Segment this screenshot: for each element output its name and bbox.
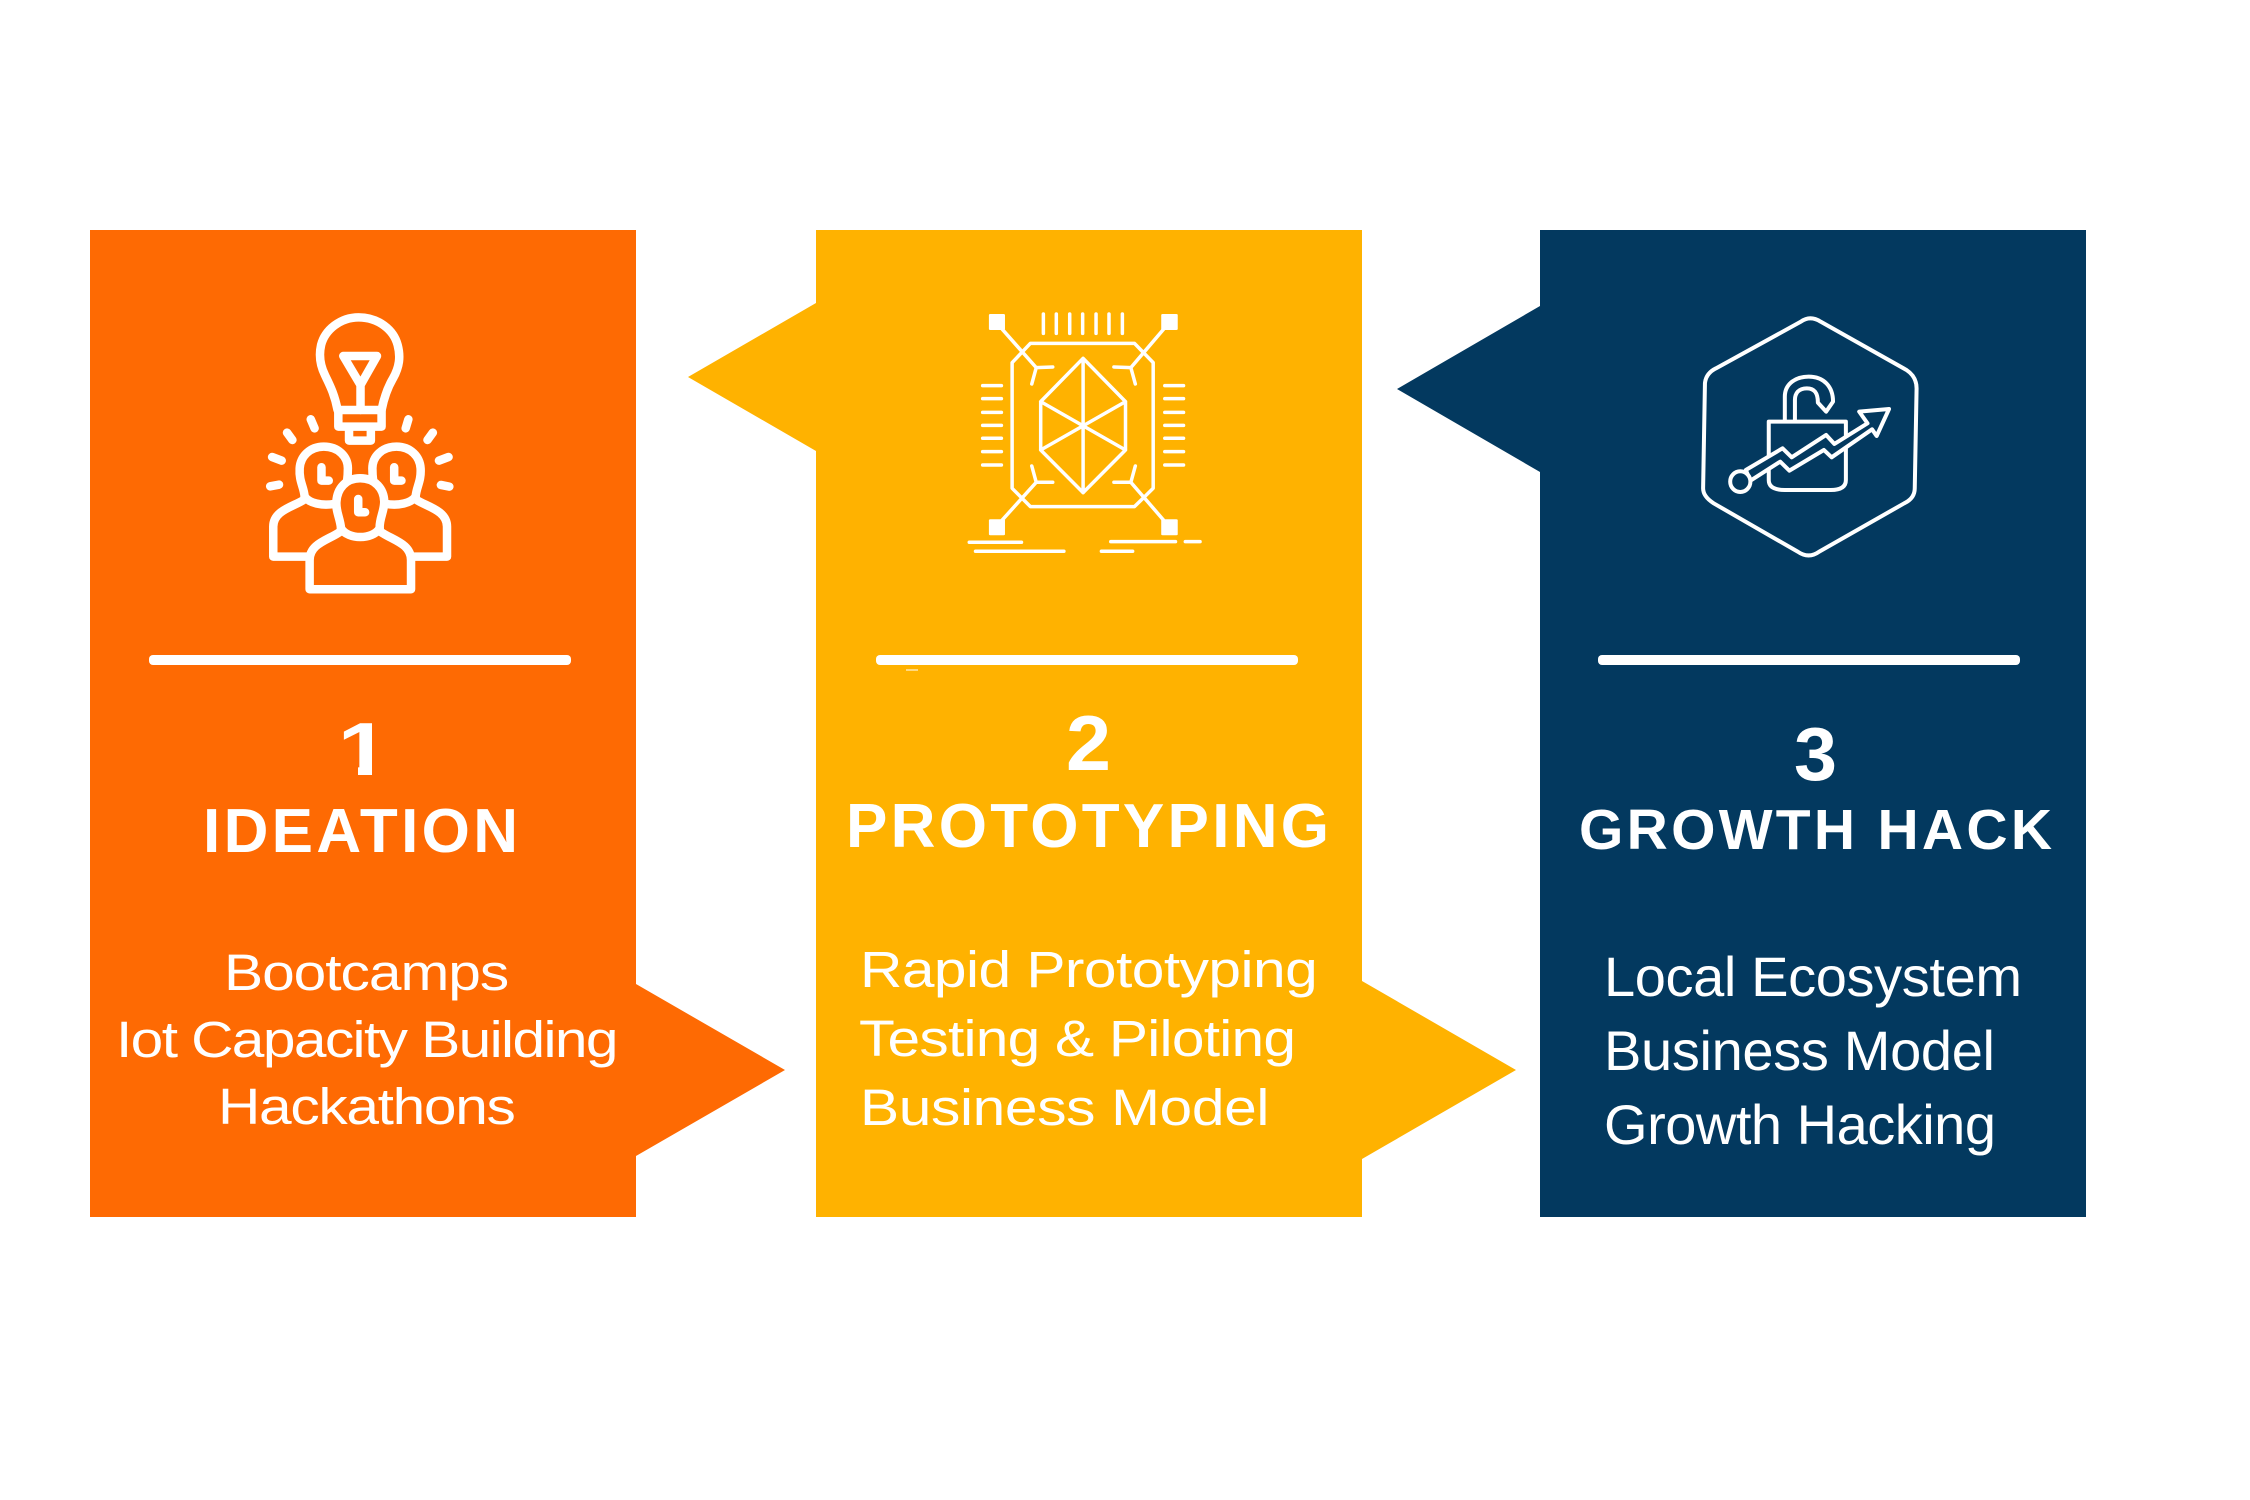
icon: unlocked padlock with growth arrow in hexagon: [1703, 318, 1917, 555]
body text: Iot Capacity Building: [116, 1011, 619, 1068]
body text: [1604, 945, 2022, 1156]
icon: chip with crystal: [969, 314, 1200, 551]
body text: Testing & Piloting: [859, 1010, 1296, 1067]
heading: GROWTH HACK: [1579, 798, 2052, 862]
divider bar: [876, 655, 1298, 665]
icon: light bulb over three people: [270, 317, 449, 589]
panel shape with left and right arrows: [688, 230, 1516, 1217]
divider bar: [149, 655, 571, 665]
heading: PROTOTYPING: [846, 792, 1329, 861]
step number: 3: [1794, 712, 1837, 796]
body text: [859, 941, 1318, 1136]
heading: IDEATION: [203, 797, 518, 866]
body text: Growth Hacking: [1604, 1093, 1996, 1156]
panel: ideation: [90, 230, 785, 1217]
body text: [116, 944, 619, 1135]
step number: 2: [1066, 699, 1111, 787]
panel: growth hack: [1397, 230, 2086, 1217]
panel shape with right arrow: [90, 230, 785, 1217]
body text: Business Model: [860, 1079, 1269, 1136]
divider bar: [1598, 655, 2020, 665]
body text: Rapid Prototyping: [860, 941, 1318, 998]
panel shape with left arrow: [1397, 230, 2086, 1217]
body text: Bootcamps: [224, 944, 509, 1001]
body text: Hackathons: [218, 1078, 516, 1135]
panel: prototyping: [688, 230, 1516, 1217]
body text: Business Model: [1604, 1019, 1995, 1082]
body text: Local Ecosystem: [1604, 945, 2022, 1008]
step number: 1: [338, 707, 390, 791]
